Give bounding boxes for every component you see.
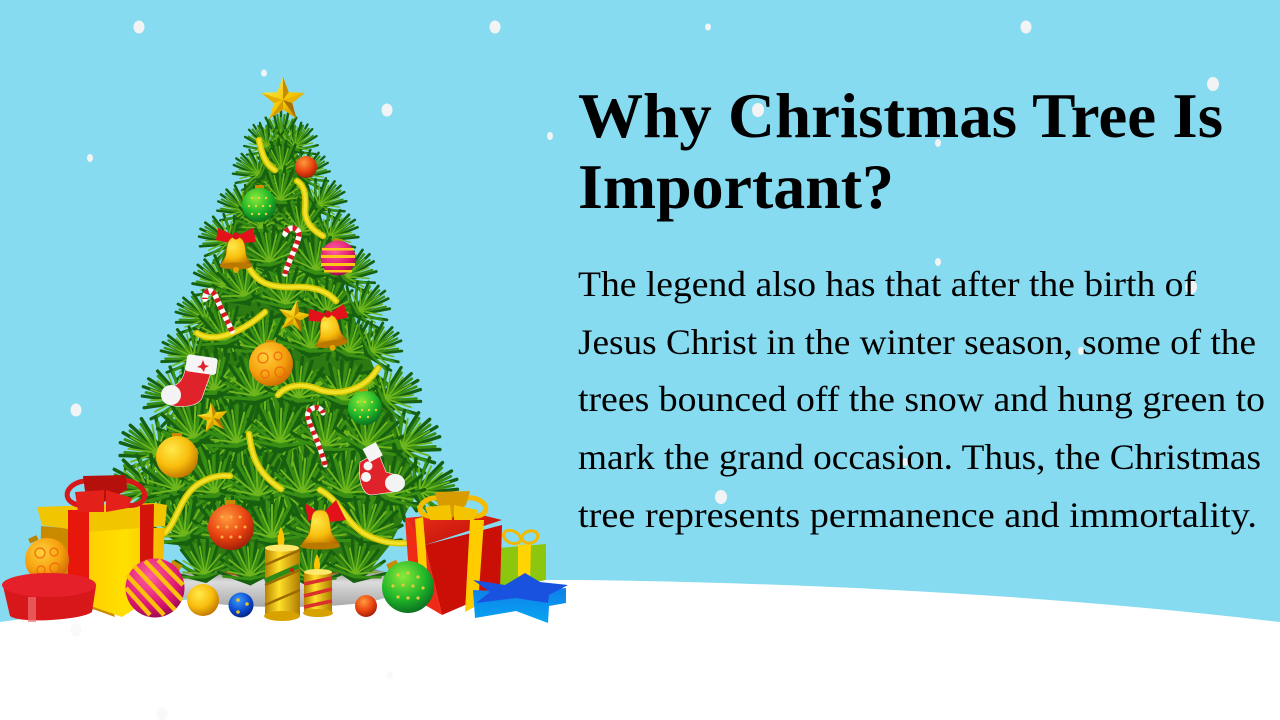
small red bauble [295, 156, 317, 178]
orange bauble [249, 340, 293, 386]
candy cane [205, 291, 232, 331]
small gold star [196, 400, 230, 433]
yellow bauble [156, 433, 198, 478]
blue star box [473, 573, 568, 623]
white dotted stocking [360, 442, 405, 495]
striped pink bauble [320, 239, 356, 276]
red orange bauble [208, 500, 254, 550]
body paragraph [578, 264, 1265, 535]
green bauble [242, 185, 276, 222]
green gift box [498, 528, 546, 590]
tall gold candle [264, 527, 300, 621]
snow ground [0, 580, 1280, 720]
title: Why Christmas Tree Is [578, 80, 1223, 151]
red gift box with yellow ribbon [405, 491, 502, 615]
candy cane [285, 228, 299, 274]
gold garlands [165, 140, 406, 543]
small orange bauble [355, 595, 377, 617]
gold spiral bauble [25, 535, 69, 582]
red bow gold bell [216, 228, 256, 273]
body paragraph: The legend also has that after the birth of [578, 264, 1196, 304]
title [578, 80, 1223, 222]
short striped candle [303, 554, 333, 617]
christmas tree illustration [2, 77, 568, 623]
star tree topper [261, 77, 305, 119]
title: Important? [578, 151, 894, 222]
tree foliage [100, 111, 467, 588]
red round gift box [2, 573, 96, 622]
body paragraph: Jesus Christ in the winter season, some of the [578, 322, 1256, 362]
silver tree stand [178, 559, 392, 607]
large green bauble [382, 560, 434, 613]
body paragraph: trees bounced off the snow and hung green to [578, 379, 1265, 419]
red bow gold bell [307, 303, 353, 354]
body paragraph: mark the grand occasion. Thus, the Christmas [578, 437, 1261, 477]
small gold star [276, 297, 313, 333]
yellow gift box with red ribbon [37, 475, 167, 617]
striped bauble [126, 558, 184, 618]
striped green bauble [348, 389, 382, 425]
small yellow bauble [187, 584, 219, 616]
big gold bell [300, 500, 346, 550]
blue bauble [228, 592, 254, 618]
red stocking [161, 354, 218, 407]
body paragraph: tree represents permanence and immortality. [578, 495, 1257, 535]
candy cane [308, 408, 325, 465]
